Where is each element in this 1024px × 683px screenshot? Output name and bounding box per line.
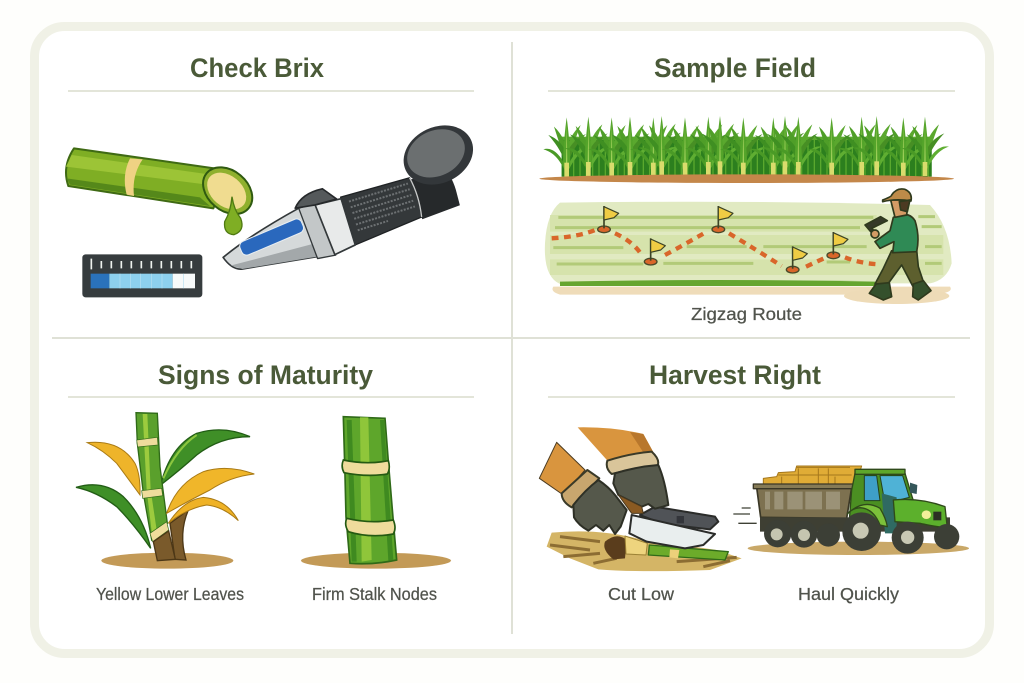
- icon: cutting cane by hand: [539, 427, 742, 571]
- icon: tractor and trailer: [733, 466, 969, 555]
- cane row: [539, 116, 954, 183]
- panel: sample field: [539, 53, 955, 324]
- label: haul quickly: Haul Quickly: [798, 584, 899, 604]
- panel: signs of maturity: [68, 360, 474, 604]
- icon: refractometer cap: [394, 114, 483, 196]
- heading: check brix: Check Brix: [190, 53, 324, 83]
- panel: harvest right: [539, 360, 969, 604]
- heading: harvest right: Harvest Right: [649, 360, 821, 390]
- label: firm stalk nodes: Firm Stalk Nodes: [312, 584, 437, 604]
- field strip: [545, 202, 952, 304]
- label: yellow lower leaves: Yellow Lower Leaves: [96, 584, 244, 604]
- icon: cut cane: [66, 148, 261, 224]
- illustration: cane and refractometer: [66, 114, 483, 297]
- icon: refractometer: [212, 150, 464, 287]
- panel: check brix: [66, 53, 483, 297]
- illustration: harvest: [539, 427, 969, 571]
- label: zigzag route: Zigzag Route: [691, 304, 802, 324]
- icon: juice drop: [225, 197, 242, 235]
- heading: sample field: Sample Field: [654, 53, 816, 83]
- label: cut low: Cut Low: [608, 584, 674, 604]
- illustration: maturity signs: [76, 413, 451, 569]
- zigzag route: [552, 229, 878, 267]
- figure: walking scout: [865, 189, 931, 300]
- heading: signs of maturity: Signs of Maturity: [158, 360, 373, 390]
- flags: [598, 206, 848, 273]
- icon: yellow lower leaves plant: [76, 413, 254, 569]
- icon: firm stalk nodes: [301, 417, 451, 569]
- illustration: field and route: [539, 116, 954, 304]
- icon: brix scale: [82, 254, 202, 297]
